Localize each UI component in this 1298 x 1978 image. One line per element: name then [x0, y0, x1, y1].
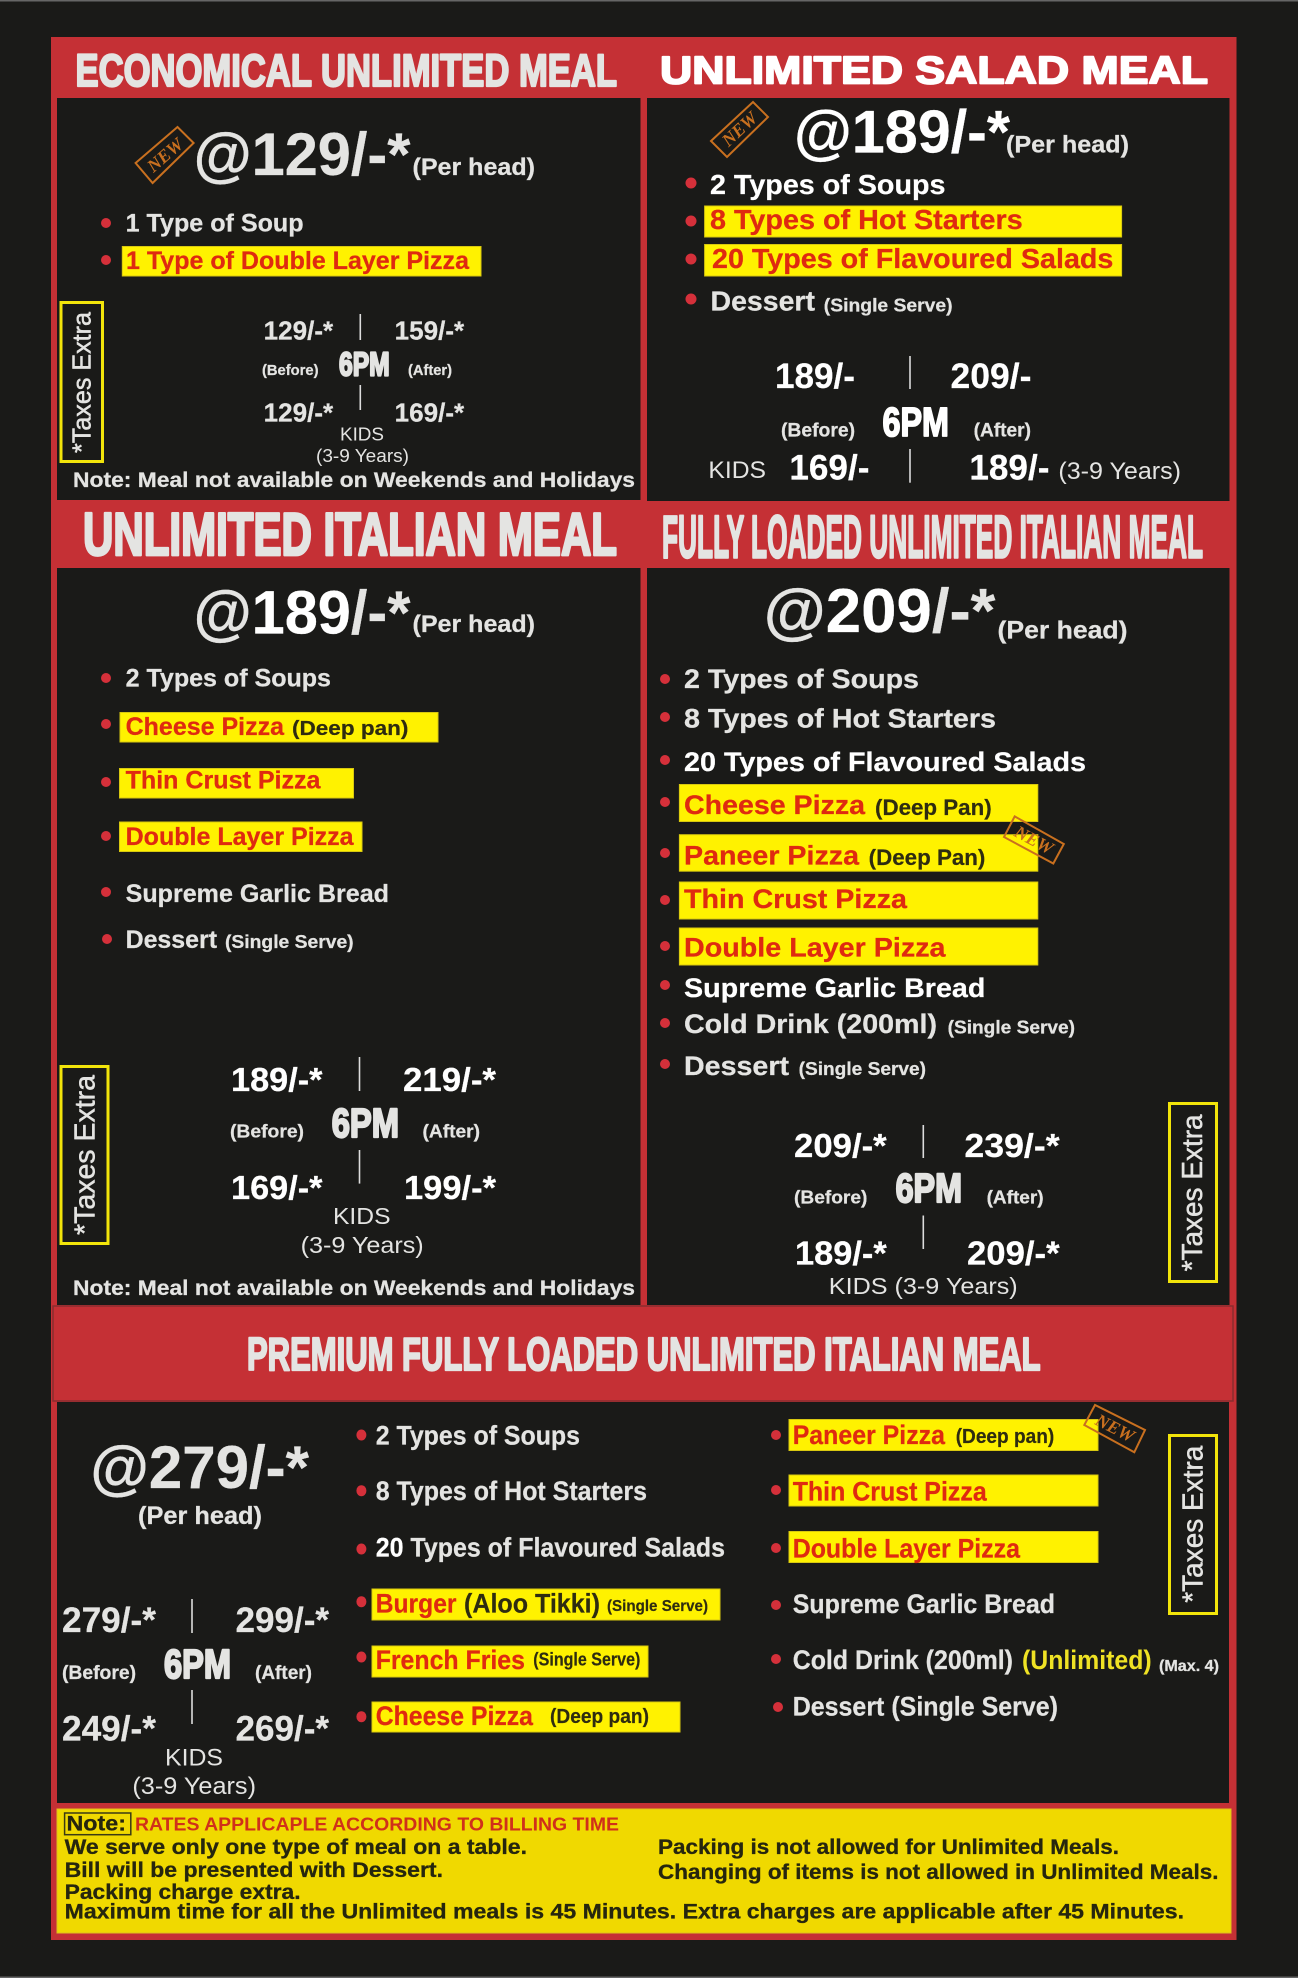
- taxes extra: *Taxes Extra: [66, 311, 96, 453]
- note: Note: Meal not available on Weekends and Holidays: [73, 1276, 635, 1300]
- price table: 129/-*: [264, 400, 333, 428]
- bullet list: (Deep Pan): [869, 845, 985, 870]
- middle item list: (Single Serve): [607, 1598, 708, 1615]
- bullet list: [101, 665, 438, 954]
- price table: 6PM: [882, 399, 949, 445]
- price table: (After): [422, 1122, 480, 1142]
- right item list: [771, 1420, 1219, 1722]
- bullet list: (Deep Pan): [875, 795, 992, 820]
- left notes: Packing charge extra.: [65, 1881, 301, 1904]
- price table: 169/-*: [395, 400, 464, 428]
- price table: KIDS (3-9 Years): [829, 1273, 1018, 1299]
- price table: KIDS: [340, 425, 384, 445]
- price table: 6PM: [332, 1100, 399, 1146]
- bullet list: (Single Serve): [225, 932, 354, 952]
- price table: (Before): [794, 1188, 867, 1208]
- panel: fully loaded meal: [647, 568, 1230, 1305]
- right item list: Dessert (Single Serve): [793, 1692, 1058, 1722]
- bullet list: Thin Crust Pizza: [684, 884, 908, 914]
- note: Note: Meal not available on Weekends and Holidays: [73, 468, 635, 492]
- price table: (After): [987, 1188, 1044, 1208]
- price table: 249/-*: [62, 1710, 156, 1749]
- price table: KIDS: [165, 1745, 223, 1772]
- price table: 199/-*: [404, 1169, 496, 1206]
- taxes extra: [61, 1066, 108, 1244]
- taxes extra: *Taxes Extra: [1178, 1445, 1210, 1603]
- price table: 189/-*: [231, 1061, 323, 1098]
- right notes: Packing is not allowed for Unlimited Meals.: [658, 1836, 1119, 1859]
- bullet list: 8 Types of Hot Starters: [710, 204, 1023, 235]
- price: @279/-*: [90, 1434, 310, 1501]
- price table: 269/-*: [236, 1710, 329, 1749]
- per head: (Per head): [1006, 132, 1129, 159]
- taxes extra: *Taxes Extra: [70, 1074, 102, 1235]
- panel: premium meal: [57, 1402, 1229, 1803]
- price table: [230, 1057, 496, 1258]
- middle item list: French Fries: [376, 1645, 525, 1675]
- right item list: Supreme Garlic Bread: [793, 1589, 1055, 1619]
- badge: new: [1004, 816, 1064, 864]
- bullet list: (Single Serve): [799, 1059, 926, 1079]
- bullet list: Cheese Pizza: [126, 713, 285, 741]
- bullet list: Paneer Pizza: [684, 840, 860, 870]
- price table: 169/-: [789, 448, 869, 487]
- middle item list: (Aloo Tikki): [464, 1589, 600, 1619]
- badge: new: NEW: [717, 106, 763, 151]
- price table: (Before): [230, 1122, 304, 1142]
- panel: italian meal: [57, 568, 640, 1305]
- price table: (Before): [262, 363, 319, 379]
- title: unlimited salad meal: UNLIMITED SALAD MEAL: [660, 50, 1208, 92]
- badge: new: NEW: [142, 133, 189, 177]
- price table: (3-9 Years): [301, 1232, 424, 1258]
- right item list: Double Layer Pizza: [793, 1533, 1021, 1563]
- price table: (After): [255, 1663, 312, 1684]
- price table: (Before): [781, 420, 855, 442]
- bullet list: Cheese Pizza: [684, 790, 866, 820]
- taxes extra: [1170, 1104, 1216, 1282]
- panel: yellow note: [57, 1809, 1231, 1933]
- middle item list: (Single Serve): [533, 1650, 640, 1670]
- middle item list: (Deep pan): [550, 1706, 649, 1728]
- bullet list: 1 Type of Double Layer Pizza: [126, 247, 470, 275]
- right item list: Paneer Pizza: [793, 1420, 946, 1450]
- middle item list: [356, 1420, 725, 1732]
- bullet list: (Deep pan): [292, 718, 408, 740]
- price table: 6PM: [339, 346, 390, 383]
- bullet list: Supreme Garlic Bread: [126, 880, 389, 908]
- price table: 6PM: [896, 1165, 962, 1211]
- right item list: Thin Crust Pizza: [793, 1477, 988, 1507]
- price table: (After): [408, 363, 452, 379]
- right item list: (Unlimited): [1022, 1645, 1152, 1675]
- bullet list: Double Layer Pizza: [684, 933, 947, 963]
- price table: KIDS: [708, 457, 766, 484]
- price table: KIDS: [333, 1203, 390, 1229]
- price table: 159/-*: [395, 318, 464, 346]
- right item list: (Max. 4): [1159, 1658, 1219, 1675]
- panel: salad meal: [647, 98, 1230, 501]
- per head: (Per head): [412, 154, 535, 181]
- right item list: Cold Drink (200ml): [793, 1645, 1013, 1675]
- banner: premium fully loaded unlimited italian meal: [53, 1306, 1233, 1401]
- badge: new: [136, 127, 194, 183]
- price table: (3-9 Years): [132, 1773, 256, 1800]
- right notes: [658, 1836, 1218, 1884]
- badge: new: NEW: [1010, 821, 1059, 859]
- taxes extra: [1170, 1436, 1216, 1614]
- bullet list: [660, 664, 1086, 1081]
- per head: (Per head): [998, 617, 1128, 645]
- price table: 209/-*: [967, 1235, 1060, 1272]
- bullet list: Double Layer Pizza: [126, 823, 355, 851]
- price table: 209/-*: [794, 1127, 887, 1164]
- bullet list: 2 Types of Soups: [684, 664, 919, 694]
- middle item list: Cheese Pizza: [376, 1701, 534, 1731]
- price table: 209/-: [950, 357, 1032, 396]
- price table: (3-9 Years): [316, 446, 409, 466]
- price: @209/-*: [764, 577, 996, 646]
- right notes: Changing of items is not allowed in Unlimited Meals.: [658, 1861, 1218, 1884]
- price table: 189/-: [969, 448, 1049, 487]
- note label: Note:: [66, 1813, 126, 1836]
- bullet list: Thin Crust Pizza: [126, 767, 322, 795]
- price table: [708, 356, 1181, 487]
- left notes: Bill will be presented with Dessert.: [65, 1859, 443, 1882]
- bullet list: 20 Types of Flavoured Salads: [684, 747, 1086, 777]
- bullet list: Cold Drink (200ml): [684, 1009, 937, 1039]
- badge: new: [711, 102, 768, 157]
- price table: 279/-*: [62, 1601, 156, 1640]
- price table: 189/-: [775, 357, 855, 396]
- bullet list: 1 Type of Soup: [126, 210, 304, 238]
- price table: (3-9 Years): [1058, 458, 1181, 485]
- bullet list: 2 Types of Soups: [126, 665, 331, 693]
- left notes: Maximum time for all the Unlimited meals is 45 Minutes. Extra charges are applicable after 45 Minutes.: [65, 1900, 1184, 1924]
- price table: 299/-*: [236, 1601, 329, 1640]
- price table: [262, 314, 464, 466]
- bullet list: [686, 169, 1122, 317]
- bullet list: 20 Types of Flavoured Salads: [712, 243, 1113, 274]
- middle item list: Burger: [376, 1589, 457, 1619]
- price table: 169/-*: [231, 1169, 323, 1206]
- title: unlimited italian meal: UNLIMITED ITALIAN MEAL: [83, 501, 617, 568]
- price table: (After): [974, 420, 1031, 442]
- left notes: [65, 1836, 1184, 1924]
- left notes: We serve only one type of meal on a table.: [65, 1836, 527, 1859]
- price table: [794, 1125, 1060, 1299]
- bullet list: 8 Types of Hot Starters: [684, 704, 996, 734]
- bullet list: Dessert: [126, 926, 218, 954]
- bullet list: Supreme Garlic Bread: [684, 973, 985, 1003]
- taxes extra: [61, 302, 102, 462]
- title: economical unlimited meal: ECONOMICAL UNLIMITED MEAL: [76, 45, 617, 96]
- right item list: (Deep pan): [956, 1426, 1054, 1448]
- price: @189/-*: [794, 99, 1011, 166]
- price table: 189/-*: [795, 1235, 887, 1272]
- price: @189/-*: [194, 578, 411, 646]
- badge: new: [1084, 1405, 1145, 1452]
- price table: 129/-*: [264, 318, 333, 346]
- bullet list: Dessert: [684, 1051, 789, 1081]
- price table: 6PM: [164, 1641, 231, 1687]
- price table: 239/-*: [964, 1127, 1060, 1164]
- panel: economical meal: [57, 98, 640, 500]
- bullet list: (Single Serve): [948, 1018, 1075, 1038]
- price table: (Before): [62, 1663, 136, 1684]
- middle item list: 8 Types of Hot Starters: [376, 1476, 647, 1506]
- bullet list: Dessert: [710, 286, 815, 317]
- bullet list: 2 Types of Soups: [710, 169, 946, 200]
- per head: (Per head): [412, 611, 535, 638]
- taxes extra: *Taxes Extra: [1177, 1114, 1209, 1271]
- billing time heading: RATES APPLICAPLE ACCORDING TO BILLING TIME: [135, 1814, 619, 1835]
- middle item list: 2 Types of Soups: [376, 1420, 580, 1450]
- per head: (Per head): [138, 1502, 262, 1530]
- price table: [62, 1599, 329, 1800]
- bullet list: (Single Serve): [824, 296, 953, 316]
- bullet list: [101, 210, 481, 276]
- price table: 219/-*: [403, 1061, 496, 1098]
- price: @129/-*: [194, 121, 411, 188]
- middle item list: 20 Types of Flavoured Salads: [376, 1533, 725, 1563]
- badge: new: NEW: [1091, 1409, 1140, 1447]
